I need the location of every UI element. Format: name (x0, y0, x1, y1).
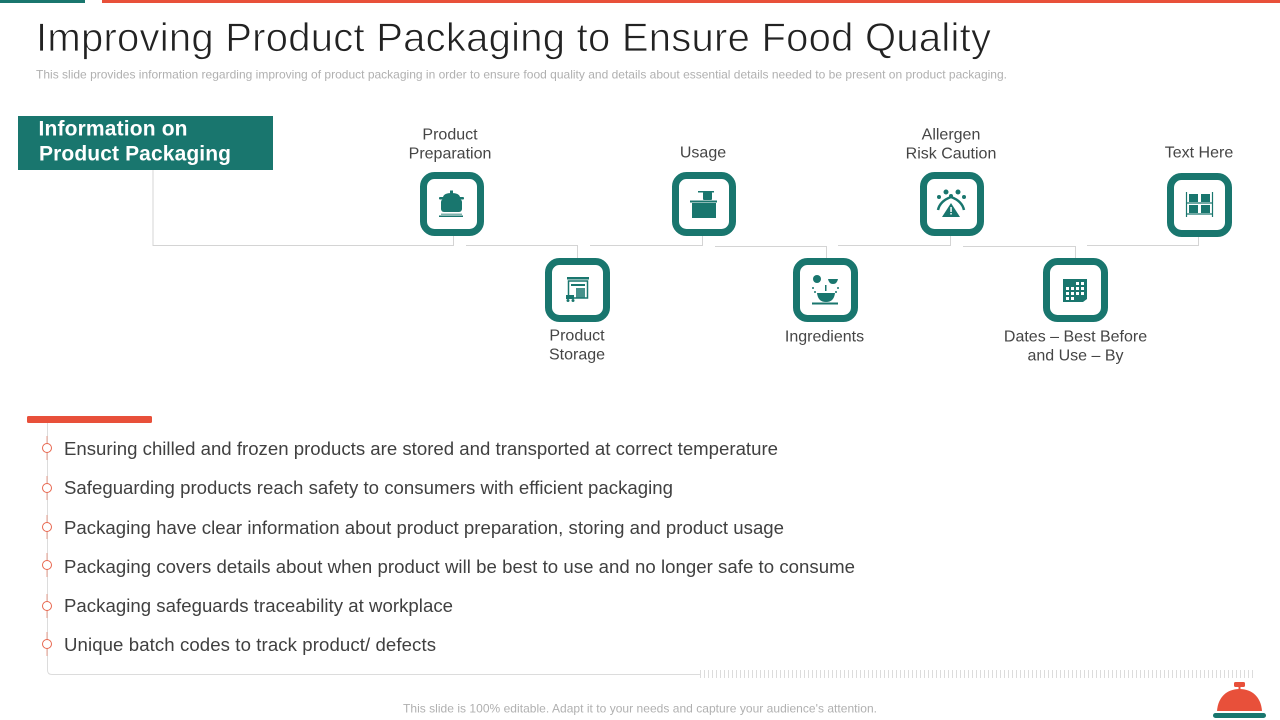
step: product preparation (409, 126, 491, 232)
label: dates best before and use by: Dates – Best Before (1004, 328, 1147, 346)
icon: storage shelves (1170, 176, 1228, 234)
step: product storage (548, 262, 606, 364)
heading box: information on product packaging: Product Packaging (39, 142, 231, 166)
subtitle: This slide provides information regarding improving of product packaging in order to ensure food quality and details about essential details needed to be present on product packaging. (36, 68, 1007, 82)
label: text here: Text Here (1165, 144, 1233, 162)
step: usage (676, 144, 732, 232)
heading box: information on product packaging (18, 116, 273, 170)
bullet 5: Packaging safeguards traceability at workplace (64, 595, 453, 616)
red accent bar (27, 416, 152, 423)
label: dates best before and use by: and Use – By (1027, 348, 1124, 364)
bullet panel frame (48, 423, 700, 674)
icon: allergen warning (924, 176, 980, 232)
label: product preparation: Product (422, 126, 478, 144)
bullet list (42, 436, 855, 656)
label: allergen risk caution: Allergen (922, 126, 980, 144)
heading box: information on product packaging: Information on (38, 118, 188, 140)
bullet 6: Unique batch codes to track product/ defects (64, 634, 436, 655)
bullet 1: Ensuring chilled and frozen products are stored and transported at correct temperature (64, 438, 778, 459)
title: Improving Product Packaging to Ensure Food Quality (36, 16, 991, 60)
step: text here (1165, 144, 1233, 234)
footer note: This slide is 100% editable. Adapt it to your needs and capture your audience's attention. (403, 702, 877, 716)
icon: service bell (1213, 682, 1266, 718)
bullet 4: Packaging covers details about when product will be best to use and no longer safe to consume (64, 556, 855, 577)
label: allergen risk caution: Risk Caution (906, 146, 996, 162)
hatch strip (700, 670, 1254, 678)
label: usage: Usage (680, 144, 726, 162)
icon: calendar (1046, 262, 1104, 318)
icon: warehouse and forklift (548, 262, 606, 318)
connector lines (153, 170, 1198, 258)
bullet 2: Safeguarding products reach safety to consumers with efficient packaging (64, 477, 673, 498)
bullet 3: Packaging have clear information about product preparation, storing and product usage (64, 517, 784, 538)
step: allergen risk caution (906, 126, 996, 232)
step: ingredients (785, 262, 864, 346)
icon: cooking pot on stove (424, 176, 480, 232)
label: product storage: Storage (549, 346, 605, 364)
label: product preparation: Preparation (409, 146, 491, 162)
icon: pot on counter (676, 176, 732, 232)
label: product storage: Product (549, 328, 605, 344)
step: dates (1004, 262, 1147, 364)
icon: ingredients bowl (796, 262, 854, 318)
label: ingredients: Ingredients (785, 328, 864, 346)
